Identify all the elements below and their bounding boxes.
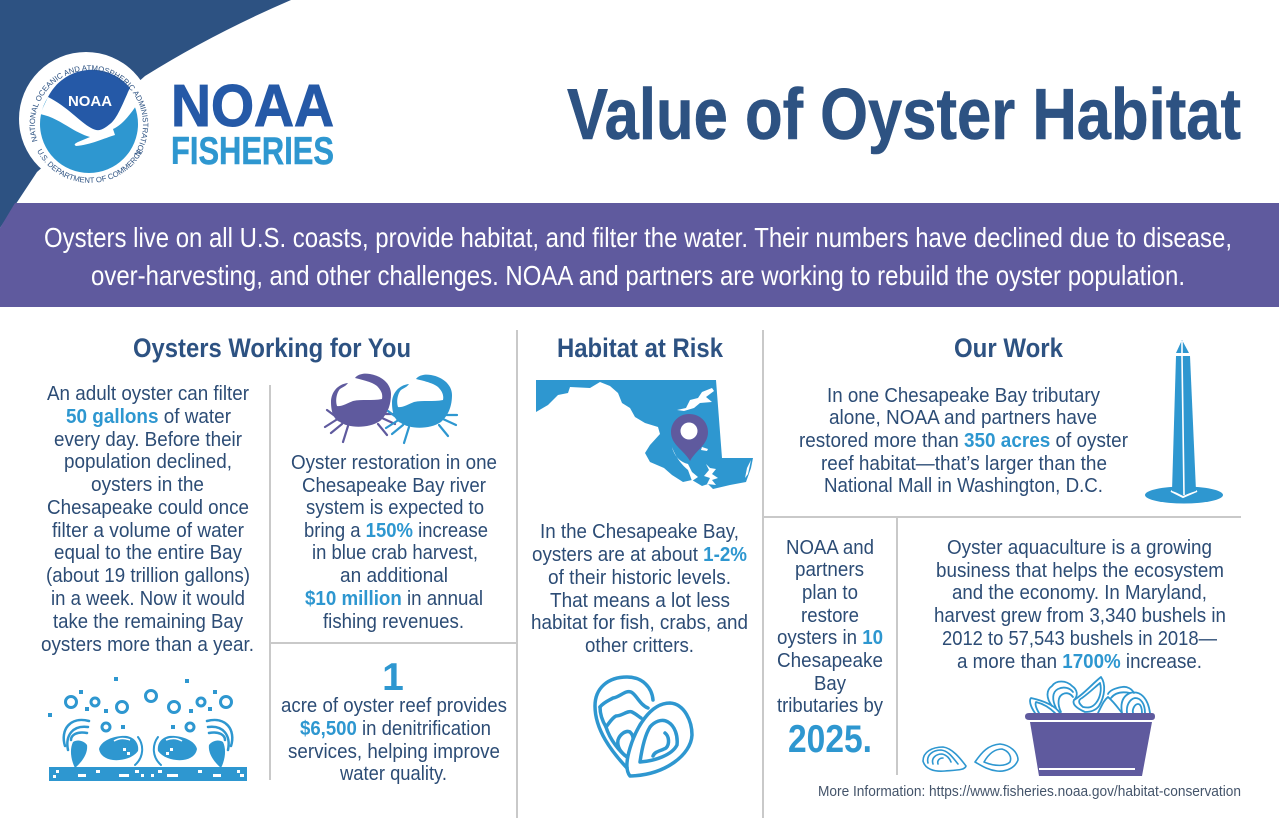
text: habitat at risk: habitat for fish, crabs, and [531, 612, 748, 634]
text: restoration plan: restore [801, 605, 859, 627]
text: restoration plan: oysters in 10 [777, 627, 883, 649]
text: adult oyster filtering: in a week. Now it would [51, 588, 245, 610]
left oyster [64, 720, 142, 768]
text: blue crab harvest: fishing revenues. [323, 611, 464, 633]
text: blue crab harvest: Chesapeake Bay river [302, 475, 486, 497]
text: restoration plan [777, 537, 883, 761]
text: blue crab harvest: in blue crab harvest, [312, 542, 478, 564]
text: Our Work intro: National Mall in Washington, D.C. [824, 475, 1103, 497]
text: habitat at risk: That means a lot less [550, 590, 730, 612]
text: adult oyster filtering: 50 gallons of water [66, 406, 231, 428]
heading: Habitat at Risk: Habitat at Risk [557, 333, 724, 363]
text: adult oyster filtering: Chesapeake could once [47, 497, 249, 519]
dark blue corner shape [0, 0, 291, 228]
text: adult oyster filtering: (about 19 trillion gallons) [46, 565, 250, 587]
loose oyster right [975, 744, 1018, 771]
text: adult oyster filtering: oysters in the [91, 474, 204, 496]
text: habitat at risk: of their historic levels. [548, 567, 731, 589]
logo name: NOAA [68, 93, 112, 110]
icon: oyster shells [595, 677, 692, 776]
text: denitrification value: services, helping improve [288, 741, 500, 763]
text: denitrification value [281, 656, 507, 785]
text: blue crab harvest: an additional [340, 565, 448, 587]
text: adult oyster filtering: population declined, [64, 451, 232, 473]
text: denitrification value: 1 [382, 656, 404, 699]
reef bar [49, 767, 247, 781]
text: oyster aquaculture: business that helps the ecosystem [936, 560, 1224, 582]
right oyster [154, 720, 232, 768]
text: restoration plan: Chesapeake [777, 650, 883, 672]
text: blue crab harvest: $10 million in annual [305, 588, 483, 610]
text: restoration plan: partners [795, 559, 864, 581]
text: restoration plan: 2025. [788, 718, 872, 761]
heading: Our Work: Our Work [954, 333, 1064, 363]
text: oyster aquaculture: and the economy. In Maryland, [952, 582, 1207, 604]
Maryland shape [536, 380, 753, 489]
map of Maryland with pin [536, 380, 753, 489]
text: restoration plan: plan to [802, 582, 858, 604]
text: habitat at risk [531, 521, 748, 657]
text: oyster aquaculture: Oyster aquaculture is a growing [947, 537, 1212, 559]
loose oyster left [923, 747, 966, 771]
text: habitat at risk: oysters are at about 1-2% [532, 544, 747, 566]
text: Our Work intro: In one Chesapeake Bay tributary [827, 385, 1100, 407]
text: Our Work intro: alone, NOAA and partners have [829, 407, 1097, 429]
text: blue crab harvest [291, 452, 497, 633]
logo ring text bottom: U.S. DEPARTMENT OF COMMERCE [38, 148, 143, 183]
text: adult oyster filtering: take the remaining Bay [53, 611, 243, 633]
oysters in bucket [1030, 677, 1150, 713]
purple crab [325, 374, 396, 442]
NOAA logo emblem [19, 52, 148, 183]
text: oyster aquaculture [934, 537, 1226, 673]
text: denitrification value: water quality. [339, 763, 447, 785]
text: habitat at risk: other critters. [585, 635, 694, 657]
icon: oysters filtering water [48, 677, 247, 781]
text: oyster aquaculture: a more than 1700% increase. [957, 651, 1202, 673]
logo ring text top: NATIONAL OCEANIC AND ATMOSPHERIC ADMINISTRATION [30, 65, 148, 156]
blue crab [386, 375, 457, 443]
NOAA Fisheries wordmark [171, 73, 334, 173]
text: Our Work intro: restored more than 350 acres of oyster [799, 430, 1128, 452]
icon: two crabs [325, 374, 457, 443]
text: oyster aquaculture: 2012 to 57,543 bushels in 2018— [942, 628, 1217, 650]
icon: Washington Monument [1145, 340, 1223, 504]
text: restoration plan: Bay [814, 673, 846, 695]
text: adult oyster filtering: oysters more than a year. [41, 634, 254, 656]
banner [0, 203, 1279, 307]
icon: bucket of oysters [923, 677, 1155, 776]
text: habitat at risk: In the Chesapeake Bay, [540, 521, 739, 543]
text: restoration plan: tributaries by [777, 695, 883, 717]
location pin [671, 414, 708, 461]
text: blue crab harvest: system is expected to [306, 497, 484, 519]
text: blue crab harvest: Oyster restoration in one [291, 452, 497, 474]
banner text [44, 222, 1232, 291]
text: adult oyster filtering: An adult oyster can filter [47, 383, 249, 405]
text: adult oyster filtering: filter a volume of water [52, 520, 244, 542]
text: blue crab harvest: bring a 150% increase [304, 520, 488, 542]
Chesapeake Bay inlets [672, 388, 751, 485]
text: adult oyster filtering [41, 383, 254, 656]
bubbles [66, 690, 232, 731]
text: Our Work intro [799, 385, 1128, 497]
NOAA Fisheries wordmark: NOAA [171, 73, 334, 139]
text: adult oyster filtering: every day. Before their [54, 429, 242, 451]
text: denitrification value: $6,500 in denitrification [300, 718, 491, 740]
NOAA Fisheries wordmark: FISHERIES [171, 130, 334, 173]
text: restoration plan: NOAA and [786, 537, 874, 559]
bucket [1025, 713, 1155, 776]
text: Our Work intro: reef habitat—that’s larger than the [821, 453, 1107, 475]
text: oyster aquaculture: harvest grew from 3,340 bushels in [934, 605, 1226, 627]
text: denitrification value: acre of oyster reef provides [281, 695, 507, 717]
more information link: More Information: https://www.fisheries.noaa.gov/habitat-conservation [818, 783, 1241, 800]
heading: Oysters Working for You: Oysters Working for You [133, 333, 411, 363]
text: adult oyster filtering: equal to the entire Bay [54, 542, 242, 564]
